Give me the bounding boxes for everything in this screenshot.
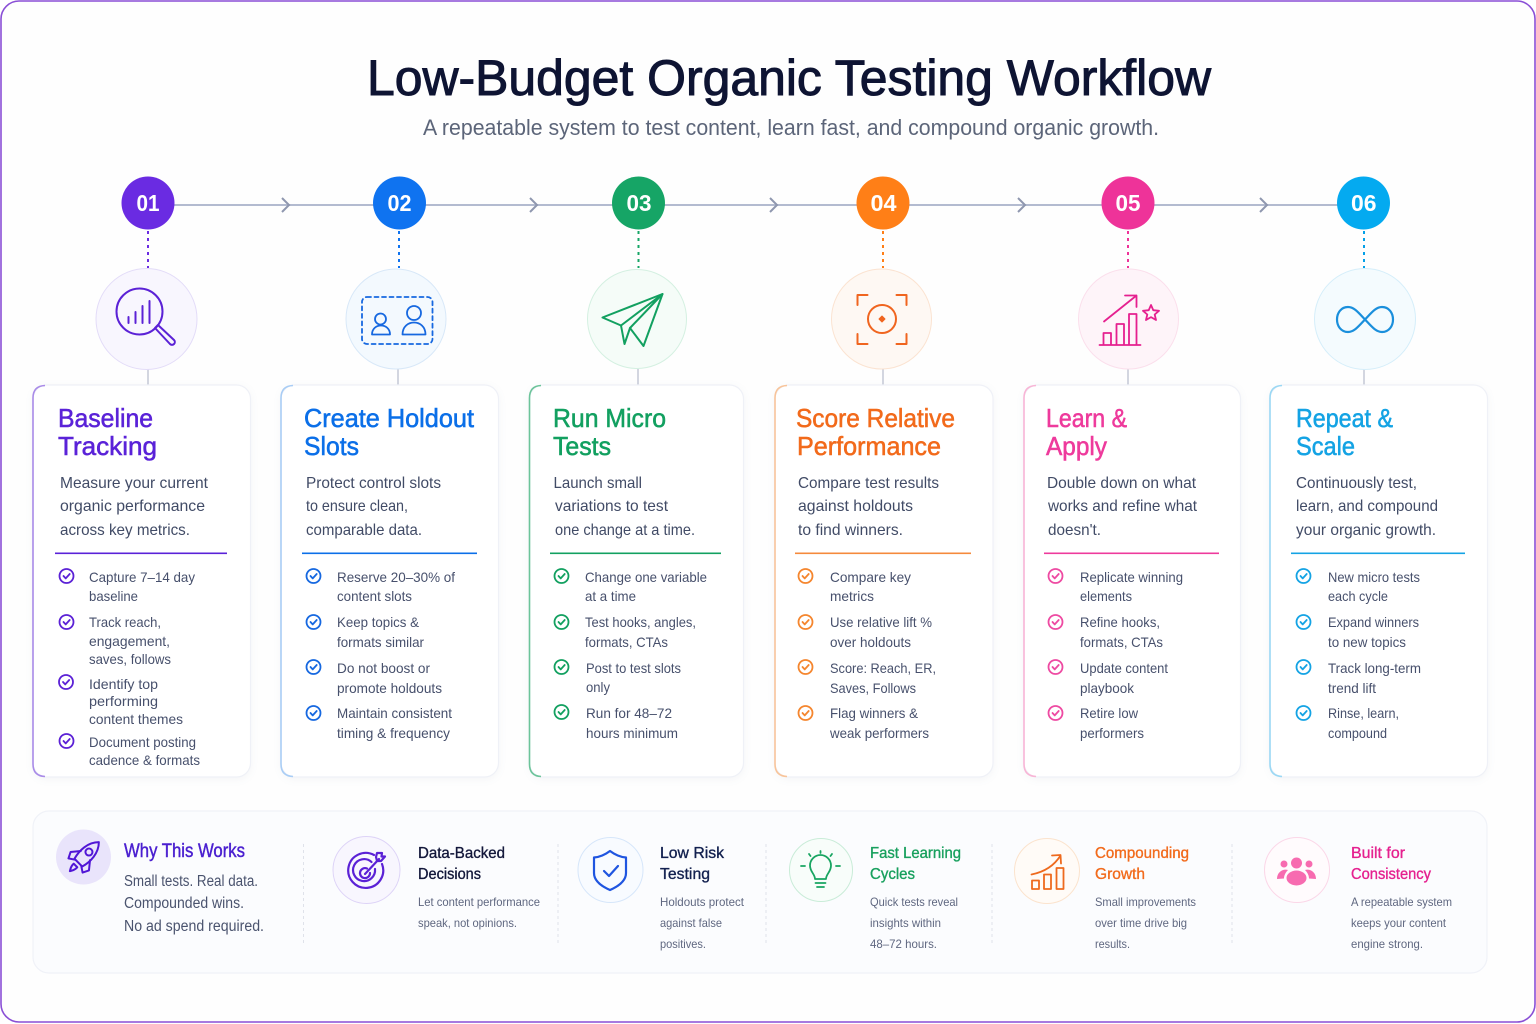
description: against holdouts (798, 498, 913, 515)
step 05 header (1078, 176, 1178, 385)
heading: Scale (1296, 431, 1355, 461)
benefit: fast learning cycles: Quick tests reveal (870, 895, 958, 909)
description: organic performance (60, 498, 205, 515)
benefit: low risk testing: Testing (660, 866, 710, 883)
checklist: cadence & formats (89, 752, 200, 768)
checklist: trend lift (1328, 680, 1376, 696)
benefit: compounding growth: Growth (1095, 866, 1145, 883)
benefit: fast learning cycles: Fast Learning (870, 845, 961, 862)
icon: rocket (61, 833, 108, 880)
description (1296, 475, 1438, 539)
heading: Learn & (1046, 403, 1127, 433)
checklist: hours minimum (586, 725, 678, 741)
icon: magnifier with bars (116, 288, 175, 345)
icon: paper plane (602, 294, 662, 346)
description: to ensure clean, (306, 498, 408, 515)
description: Double down on what (1047, 475, 1197, 492)
heading: Tracking (58, 431, 157, 461)
checklist: promote holdouts (337, 680, 442, 696)
benefit: data-backed decisions: Data-Backed (418, 845, 505, 862)
checklist: Capture 7–14 day (89, 569, 195, 585)
panel: step 02 create holdout slots (281, 385, 498, 777)
step 01 header (96, 176, 197, 385)
icon: shield check (594, 851, 626, 890)
checklist (1296, 569, 1421, 741)
checklist: Document posting (89, 734, 196, 750)
heading: Score Relative (796, 403, 955, 433)
step 06 header: 06 (1351, 190, 1376, 216)
heading (58, 403, 157, 461)
step 06 header (1314, 176, 1416, 385)
checklist: elements (1080, 588, 1132, 604)
description: comparable data. (306, 522, 422, 539)
description: your organic growth. (1296, 522, 1436, 539)
checklist: Track reach, (89, 614, 161, 630)
heading: Run Micro (553, 403, 666, 433)
checklist: Change one variable (585, 569, 707, 585)
checklist: Score: Reach, ER, (830, 660, 936, 676)
checklist: formats, CTAs (1080, 634, 1163, 650)
step 01 header: 01 (136, 190, 160, 216)
checklist: Test hooks, angles, (585, 614, 696, 630)
benefit: data-backed decisions: Let content performance (418, 895, 540, 909)
benefit: low risk testing: Low Risk (660, 845, 725, 862)
panel: step 05 learn and apply (1024, 385, 1240, 777)
checklist (306, 569, 455, 741)
checklist: Use relative lift % (830, 614, 932, 630)
checklist: Maintain consistent (337, 705, 452, 721)
heading (1296, 403, 1393, 461)
checklist: formats similar (337, 634, 424, 650)
checklist: over holdouts (830, 634, 911, 650)
checklist: Replicate winning (1080, 569, 1183, 585)
checklist: to new topics (1328, 634, 1406, 650)
icon: focus target (858, 295, 906, 344)
step 05 header: 05 (1116, 190, 1141, 216)
heading: Create Holdout (304, 403, 475, 433)
why this works: No ad spend required. (124, 918, 264, 935)
step 03 header (588, 176, 686, 385)
heading (796, 403, 955, 461)
checklist: saves, follows (89, 651, 171, 667)
checklist: Reserve 20–30% of (337, 569, 455, 585)
benefit: built for consistency: Consistency (1351, 866, 1431, 883)
step 04 header (832, 176, 932, 385)
description: Launch small (554, 475, 642, 492)
description: across key metrics. (60, 522, 190, 539)
description (1047, 475, 1198, 539)
checklist: Update content (1080, 660, 1168, 676)
benefit: compounding growth: Small improvements (1095, 895, 1196, 909)
description: learn, and compound (1296, 498, 1438, 515)
step 02 header: 02 (388, 190, 412, 216)
panel: step 06 repeat and scale (1270, 385, 1488, 777)
description: to find winners. (798, 522, 903, 539)
benefit: fast learning cycles (790, 838, 961, 951)
checklist: Refine hooks, (1080, 614, 1160, 630)
description: Continuously test, (1296, 475, 1417, 492)
icon: bars with rising curve (1032, 855, 1064, 889)
checklist: Flag winners & (830, 705, 919, 721)
checklist: Identify top (89, 676, 158, 692)
checklist (59, 569, 200, 768)
benefit: built for consistency: engine strong. (1351, 937, 1423, 951)
timeline connector with arrows (174, 198, 1338, 212)
checklist: performers (1080, 725, 1144, 741)
title: Low-Budget Organic Testing Workflow (367, 50, 1212, 106)
checklist: Do not boost or (337, 660, 430, 676)
benefit: low risk testing: positives. (660, 937, 706, 951)
checklist (1048, 569, 1183, 741)
heading: Tests (553, 431, 611, 461)
panel: why this works footer (33, 811, 1487, 973)
benefit: compounding growth: over time drive big (1095, 916, 1187, 930)
why this works (56, 830, 264, 935)
checklist: engagement, (89, 633, 170, 649)
why this works: Small tests. Real data. (124, 873, 258, 890)
checklist (798, 569, 936, 741)
panel: step 03 run micro tests (530, 385, 744, 777)
checklist (554, 569, 707, 741)
checklist: performing (89, 693, 158, 709)
description: variations to test (555, 498, 669, 515)
benefit: compounding growth: results. (1095, 937, 1130, 951)
benefit: low risk testing: Holdouts protect (660, 895, 745, 909)
benefit: built for consistency: Built for (1351, 845, 1406, 862)
step 03 header: 03 (626, 190, 652, 216)
benefit: fast learning cycles: Cycles (870, 866, 915, 883)
icon: growth chart with star (1100, 296, 1159, 345)
checklist: content slots (337, 588, 412, 604)
benefit: data-backed decisions: speak, not opinions. (418, 916, 517, 930)
description (798, 475, 939, 539)
why this works: Why This Works (124, 841, 245, 862)
description: Protect control slots (306, 475, 441, 492)
checklist: Track long-term (1328, 660, 1421, 676)
heading: Repeat & (1296, 403, 1393, 433)
checklist: New micro tests (1328, 569, 1420, 585)
heading (1046, 403, 1127, 461)
step 04 header: 04 (870, 190, 897, 216)
description (306, 475, 441, 539)
heading (553, 403, 666, 461)
benefit: compounding growth: Compounding (1095, 845, 1189, 862)
description: one change at a time. (555, 522, 695, 539)
description: doesn't. (1048, 522, 1101, 539)
benefit: compounding growth (1014, 838, 1196, 951)
benefit: data-backed decisions (333, 836, 540, 930)
icon: holdout slots (362, 297, 432, 344)
benefit: low risk testing (578, 838, 745, 951)
checklist: Post to test slots (586, 660, 681, 676)
checklist: Saves, Follows (830, 680, 916, 696)
heading: Performance (797, 431, 941, 461)
checklist: Run for 48–72 (586, 705, 672, 721)
benefit: low risk testing: against false (660, 916, 722, 930)
heading: Apply (1046, 431, 1107, 461)
heading: Baseline (58, 403, 153, 433)
checklist: Retire low (1080, 705, 1139, 721)
description: works and refine what (1047, 498, 1198, 515)
checklist: formats, CTAs (585, 634, 668, 650)
benefit: built for consistency (1264, 838, 1452, 951)
checklist: Compare key (830, 569, 911, 585)
checklist: at a time (585, 588, 636, 604)
checklist: Expand winners (1328, 614, 1419, 630)
benefit: data-backed decisions: Decisions (418, 866, 481, 883)
checklist: playbook (1080, 680, 1135, 696)
benefit: fast learning cycles: 48–72 hours. (870, 937, 937, 951)
heading (304, 403, 475, 461)
checklist: weak performers (829, 725, 929, 741)
step 02 header (346, 176, 446, 385)
benefit: fast learning cycles: insights within (870, 916, 941, 930)
why this works: Compounded wins. (124, 895, 244, 912)
icon: target with arrow (348, 853, 385, 888)
description (554, 475, 695, 539)
subtitle: A repeatable system to test content, learn fast, and compound organic growth. (423, 115, 1159, 140)
panel: step 04 score relative performance (775, 385, 993, 777)
checklist: each cycle (1328, 588, 1388, 604)
heading: Slots (304, 431, 359, 461)
benefit: built for consistency: A repeatable system (1351, 895, 1452, 909)
checklist: Rinse, learn, (1328, 705, 1399, 721)
description: Compare test results (798, 475, 939, 492)
checklist: timing & frequency (337, 725, 450, 741)
icon: light bulb (801, 851, 840, 887)
checklist: compound (1328, 725, 1387, 741)
icon: people group (1277, 858, 1316, 886)
description: Measure your current (60, 475, 209, 492)
checklist: only (586, 679, 610, 695)
icon: infinity loop (1337, 307, 1393, 332)
checklist: Keep topics & (337, 614, 420, 630)
description (60, 475, 209, 539)
panel: step 01 baseline tracking (33, 385, 250, 777)
checklist: baseline (89, 588, 138, 604)
checklist: content themes (89, 711, 183, 727)
checklist: metrics (830, 588, 874, 604)
benefit: built for consistency: keeps your content (1351, 916, 1447, 930)
